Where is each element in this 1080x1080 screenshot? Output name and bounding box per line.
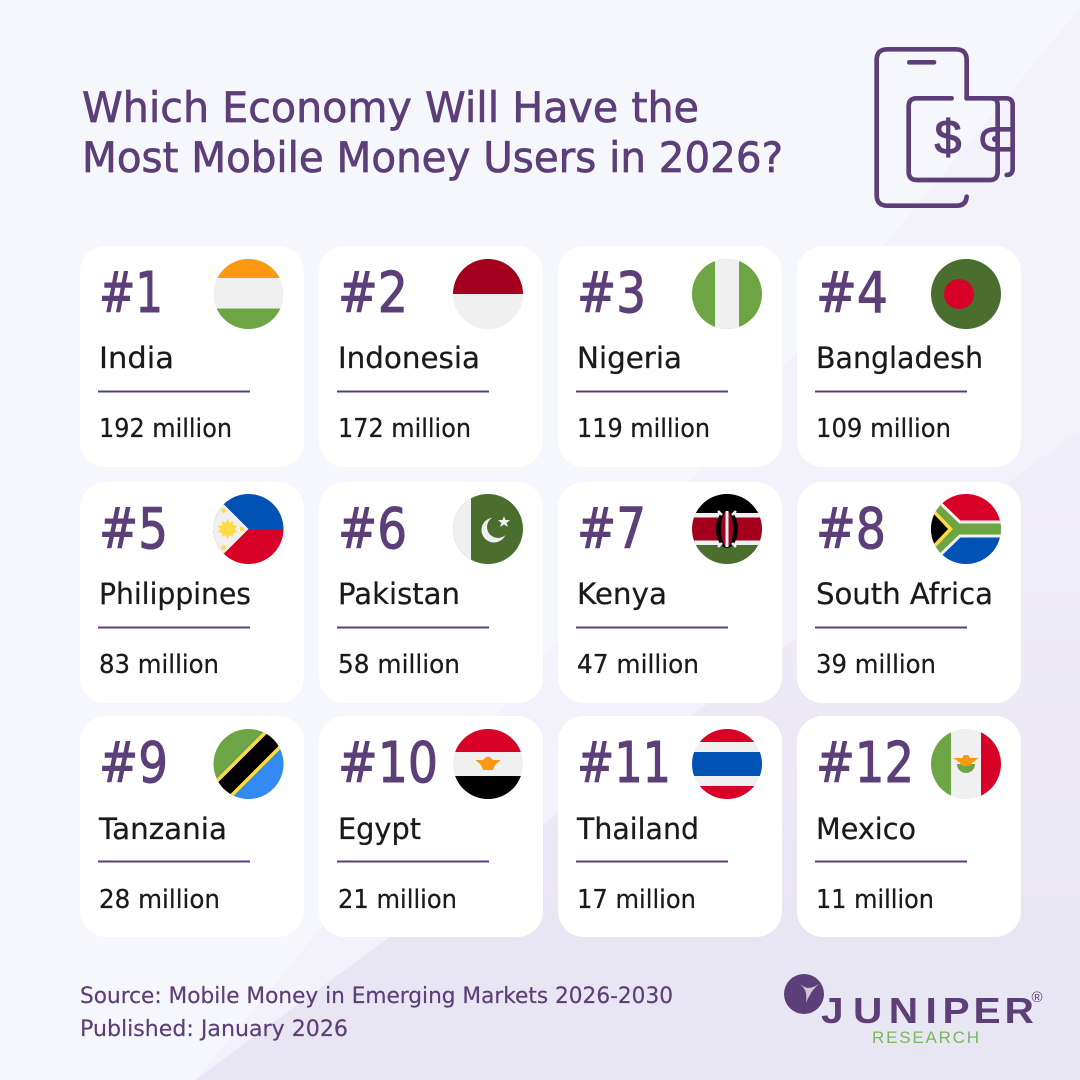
card: Nigeria [558,246,782,467]
logo: Juniper Research [784,974,1043,1047]
logo: Juniper Research: RESEARCH [872,1028,979,1047]
card: Philippines [80,482,304,703]
country: Philippines: Philippines [99,577,251,611]
logo: Juniper Research: ® [1031,989,1043,1006]
rank 10: #10 [338,731,438,796]
flag: South Africa [931,494,1001,564]
country: Egypt: Egypt [338,812,421,846]
title: Which Economy Will Have the [82,83,699,132]
rank 2: #2 [338,261,408,326]
value: Mexico: 11 million [816,885,934,915]
value: Thailand: 17 million [577,885,696,915]
country: Bangladesh: Bangladesh [816,341,983,375]
country: Indonesia: Indonesia [338,341,480,375]
value: Kenya: 47 million [577,650,699,680]
rank 1: #1 [99,261,163,326]
flag: Bangladesh [931,259,1001,329]
logo: Juniper Research: JUNIPER [821,991,1034,1031]
card: Egypt [319,716,543,937]
rank 8: #8 [816,497,886,562]
rank 5: #5 [99,497,168,562]
country: Tanzania: Tanzania [98,812,227,846]
value: India: 192 million [99,414,232,444]
rank 3: #3 [577,261,646,326]
source note [80,984,673,1042]
value: South Africa: 39 million [816,650,936,680]
flag: Indonesia [453,259,523,329]
source note: Source: Mobile Money in Emerging Markets 2026-2030 [80,984,673,1009]
rank 11: #11 [577,731,671,796]
flag: Kenya [692,494,762,564]
value: Pakistan: 58 million [338,650,460,680]
icon: phone and wallet [877,49,1013,206]
card: Bangladesh [797,246,1021,467]
card: Kenya [558,482,782,703]
flag: Egypt [453,729,523,799]
flag: India [214,259,284,330]
country: Kenya: Kenya [577,577,667,611]
card: Thailand [558,716,782,937]
card: South Africa [797,482,1021,703]
value: Philippines: 83 million [99,650,219,680]
country: India: India [99,341,174,375]
value: Bangladesh: 109 million [816,414,951,444]
icon: phone and wallet: $ [935,111,961,164]
card: Tanzania [80,716,304,937]
source note: Published: January 2026 [80,1017,348,1042]
flag: Nigeria [692,259,762,329]
country: Nigeria: Nigeria [577,341,682,375]
value: Tanzania: 28 million [99,885,220,915]
value: Nigeria: 119 million [577,414,710,444]
country: Thailand: Thailand [576,812,699,846]
rank 7: #7 [577,497,646,562]
rank 9: #9 [99,731,168,796]
card: Mexico [797,716,1021,937]
card: Pakistan [319,482,543,703]
title [82,83,783,182]
value: Egypt: 21 million [338,885,457,915]
card: India [80,246,304,467]
flag: Thailand [692,729,762,799]
value: Indonesia: 172 million [338,414,471,444]
flag: Mexico [931,729,1001,799]
rank 4: #4 [816,261,888,326]
title: Most Mobile Money Users in 2026? [82,133,783,182]
country: South Africa: South Africa [816,577,993,611]
country: Pakistan: Pakistan [338,577,460,611]
country: Mexico: Mexico [816,812,916,846]
rank 6: #6 [338,497,407,562]
card: Indonesia [319,246,543,467]
flag: Philippines [212,493,284,565]
flag: Pakistan [453,494,523,564]
rank 12: #12 [816,731,914,796]
flag: Tanzania [212,728,284,800]
